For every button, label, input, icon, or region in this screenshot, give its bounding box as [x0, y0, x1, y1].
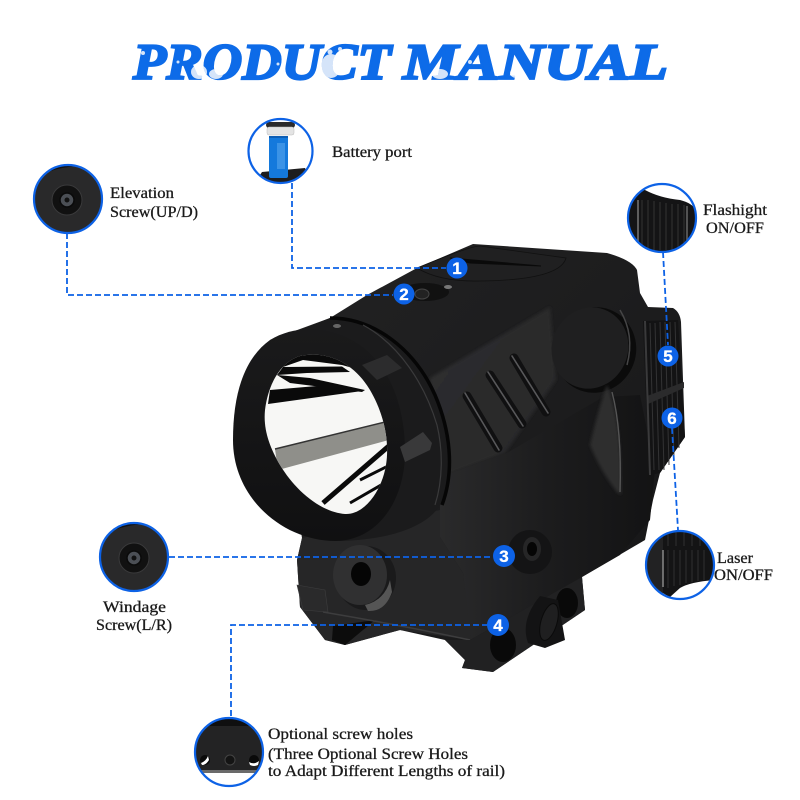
- ring tabs: [333, 324, 432, 462]
- icon: flashlight switch: [628, 184, 696, 252]
- label: windage screw: Windage: [103, 599, 166, 616]
- icon: optional screw holes: [195, 718, 263, 786]
- label: optional screw holes: (Three Optional Screw Holes: [268, 746, 468, 763]
- elevation screw on housing: [401, 283, 452, 301]
- title: [132, 35, 668, 91]
- badge 2: 2: [399, 285, 409, 304]
- badge 2: [394, 284, 414, 304]
- rear housing shade: [440, 395, 655, 640]
- label: flashlight switch: [703, 202, 768, 237]
- flashlight body: [233, 244, 685, 672]
- lens: [264, 354, 388, 514]
- gloss hollow: [590, 385, 621, 495]
- badge 4: 4: [493, 616, 503, 635]
- badge 4: [487, 614, 509, 636]
- main housing silhouette: [270, 244, 685, 672]
- label: elevation screw: Elevation: [110, 185, 174, 202]
- badge 6: [662, 408, 682, 428]
- label: battery port: Battery port: [332, 144, 413, 161]
- connector lines: [67, 183, 678, 716]
- title: PRODUCT: [132, 35, 393, 91]
- badge 1: [446, 258, 468, 278]
- label: laser switch: Laser: [717, 550, 754, 567]
- sloped light plane: [430, 307, 556, 478]
- label: windage screw: Screw(L/R): [96, 617, 172, 634]
- rail holes and thumb screw: [490, 588, 578, 662]
- label: optional screw holes: to Adapt Different Lengths of rail): [268, 763, 505, 780]
- icon: elevation screw: [34, 165, 102, 233]
- bezel ridges: [330, 318, 449, 505]
- label: optional screw holes: Optional screw holes: [268, 726, 413, 743]
- windage screw on housing: [508, 530, 552, 574]
- badge 5: 5: [663, 347, 673, 366]
- label: elevation screw: Screw(UP/D): [110, 204, 198, 221]
- laser aperture: [336, 546, 396, 610]
- label: laser switch: [714, 550, 773, 584]
- badge 6: 6: [667, 409, 677, 428]
- label: flashlight switch: ON/OFF: [706, 220, 764, 237]
- label: laser switch: ON/OFF: [714, 567, 773, 584]
- battery cap: [417, 246, 566, 281]
- badge 1: 1: [452, 259, 462, 278]
- label: optional screw holes: [268, 726, 505, 780]
- icon: windage screw: [100, 523, 168, 591]
- badge 5: [658, 346, 678, 366]
- label: elevation screw: [110, 185, 198, 221]
- three grip slots: [465, 356, 548, 450]
- laser housing: [297, 510, 471, 645]
- round side knob: [540, 296, 648, 404]
- badge 3: 3: [499, 547, 509, 566]
- badge 3: [493, 545, 515, 567]
- icon: laser switch: [646, 531, 714, 599]
- front ring: [233, 329, 405, 541]
- ribbed side switch: [643, 320, 685, 475]
- icon: battery port: [248, 119, 315, 190]
- label: windage screw: [96, 599, 172, 634]
- bezel band: [300, 318, 449, 541]
- lower rail block: [445, 577, 585, 672]
- label: flashlight switch: Flashight: [703, 202, 768, 219]
- title: MANUAL: [402, 35, 668, 91]
